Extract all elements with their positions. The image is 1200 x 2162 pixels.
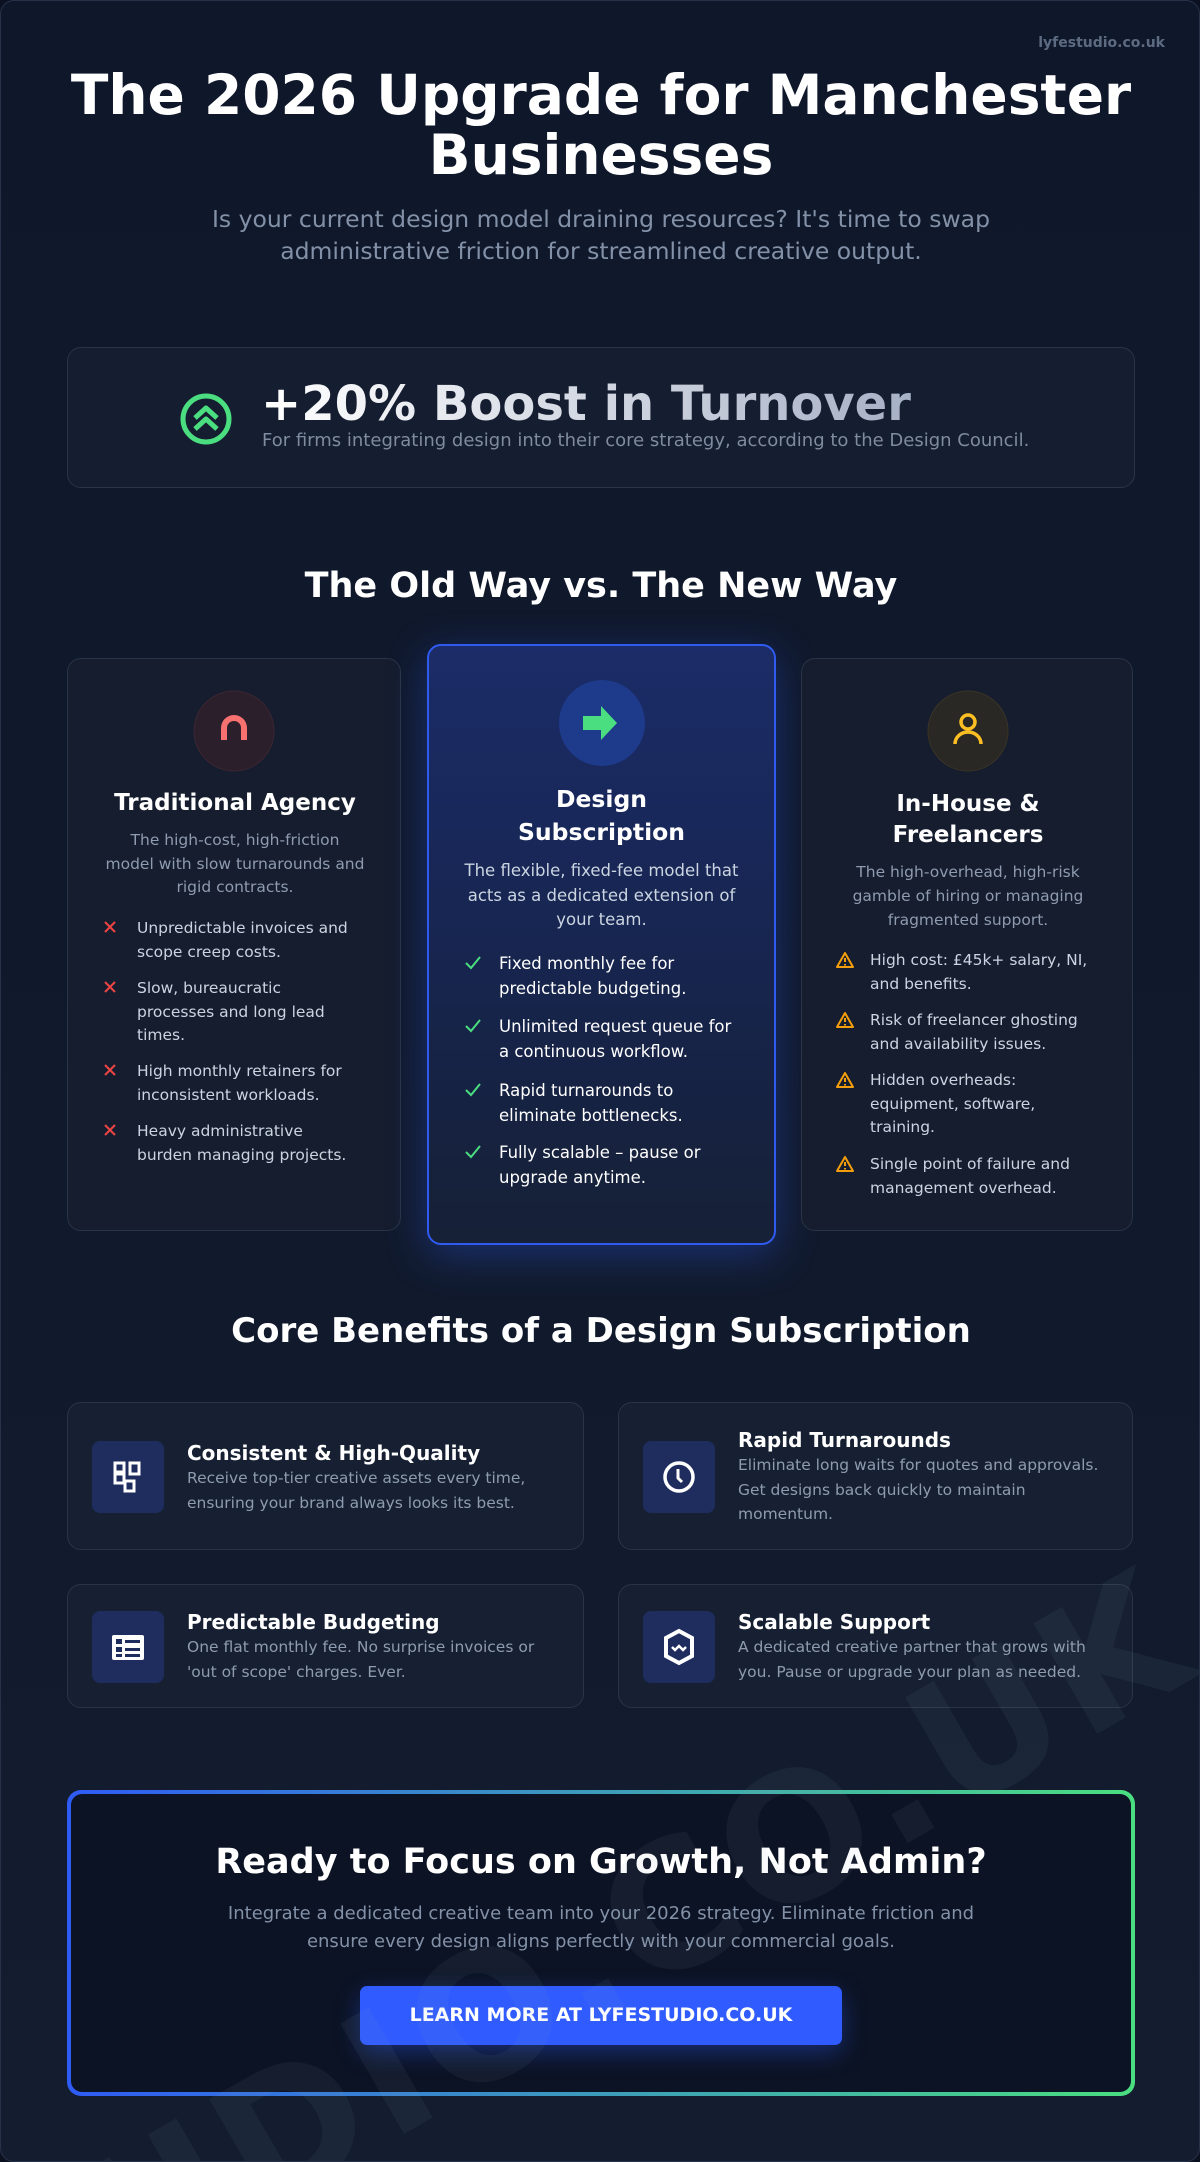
benefit: consistent (67, 1402, 584, 1550)
list: Unlimited request queue for a continuous workflow. (499, 1017, 731, 1061)
stat box (67, 347, 1135, 488)
subtitle: administrative friction for streamlined creative output. (280, 237, 922, 265)
CTA text: Integrate a dedicated creative team into your 2026 strategy. Eliminate friction and (228, 1903, 974, 1924)
title (518, 785, 685, 846)
benefit: scalable: A dedicated creative partner that grows with you. Pause or upgrade your plan as needed. (738, 1638, 1086, 1680)
benefit: rapid: Eliminate long waits for quotes and approvals. Get designs back quickly to maintain momentum. (738, 1456, 1098, 1523)
CTA button: LEARN MORE AT LYFESTUDIO.CO.UK (410, 2004, 792, 2026)
CTA text: ensure every design aligns perfectly with your commercial goals. (307, 1931, 895, 1952)
title (893, 791, 1043, 848)
CTA heading: Ready to Focus on Growth, Not Admin? (215, 1842, 987, 1882)
list: Fixed monthly fee for predictable budgeting. (499, 954, 686, 998)
benefit: consistent: Consistent & High-Quality (187, 1441, 480, 1465)
description: rigid contracts. (176, 878, 293, 896)
description: model with slow turnarounds and (106, 854, 364, 872)
panel: in-house & freelancers (801, 658, 1133, 1231)
heading: old vs new: The Old Way vs. The New Way (305, 566, 897, 606)
title (71, 63, 1131, 187)
icon: person (928, 690, 1008, 772)
title: Businesses (429, 123, 773, 187)
title: The 2026 Upgrade for Manchester (71, 63, 1131, 127)
icon: arrow (559, 680, 645, 766)
benefit: rapid (618, 1402, 1133, 1550)
list: Unpredictable invoices and scope creep costs. (137, 919, 348, 960)
list: High cost: £45k+ salary, NI, and benefits. (870, 951, 1087, 992)
benefit: rapid: Rapid Turnarounds (738, 1428, 951, 1452)
list: Single point of failure and management overhead. (870, 1155, 1070, 1196)
title: Traditional Agency (114, 790, 356, 816)
CTA button (360, 1986, 842, 2045)
subtitle: Is your current design model draining resources? It's time to swap (212, 205, 990, 233)
list: Fully scalable – pause or upgrade anytime. (499, 1143, 701, 1187)
benefit: budgeting: One flat monthly fee. No surprise invoices or 'out of scope' charges. Ever. (187, 1638, 534, 1680)
description: The high-overhead, high-risk gamble of hiring or managing fragmented support. (853, 863, 1083, 929)
subtitle (212, 205, 990, 265)
icon: up chevrons (180, 394, 232, 444)
panel: design subscription (427, 644, 776, 1245)
description: The flexible, fixed-fee model that acts as a dedicated extension of your team. (465, 861, 738, 929)
benefit: consistent: Receive top-tier creative assets every time, ensuring your brand always looks its best. (187, 1469, 525, 1512)
CTA panel (67, 1790, 1135, 2096)
description: The high-cost, high-friction (131, 831, 339, 849)
benefit: scalable: Scalable Support (738, 1610, 930, 1634)
list (465, 954, 732, 1187)
title: Subscription (518, 818, 685, 846)
icon: blocks (92, 1441, 164, 1513)
list (836, 951, 1087, 1196)
list: Heavy administrative burden managing projects. (137, 1122, 346, 1164)
list: High monthly retainers for inconsistent workloads. (137, 1062, 342, 1104)
benefit: budgeting (67, 1584, 584, 1708)
list (104, 919, 348, 1164)
title: Design (556, 785, 647, 813)
list: Rapid turnarounds to eliminate bottlenecks. (499, 1081, 683, 1125)
icon: clock (643, 1441, 715, 1513)
icon: shield (643, 1611, 715, 1683)
list: Slow, bureaucratic processes and long lead times. (137, 979, 325, 1044)
site label: lyfestudio.co.uk (1038, 35, 1165, 51)
description (106, 831, 364, 896)
icon: list (92, 1611, 164, 1683)
benefit: budgeting: Predictable Budgeting (187, 1610, 440, 1634)
list: Risk of freelancer ghosting and availability issues. (870, 1011, 1078, 1052)
heading: core benefits: Core Benefits of a Design Subscription (231, 1311, 971, 1351)
title: Freelancers (893, 822, 1043, 848)
benefit: scalable (618, 1584, 1133, 1708)
stat headline: +20% Boost in Turnover (261, 376, 911, 432)
panel: traditional agency (67, 658, 401, 1231)
title: In-House & (896, 791, 1040, 817)
stat caption: For firms integrating design into their core strategy, according to the Design Council. (262, 430, 1029, 451)
icon: magnet (194, 690, 274, 772)
CTA text (228, 1903, 974, 1952)
list: Hidden overheads: equipment, software, training. (870, 1071, 1035, 1136)
